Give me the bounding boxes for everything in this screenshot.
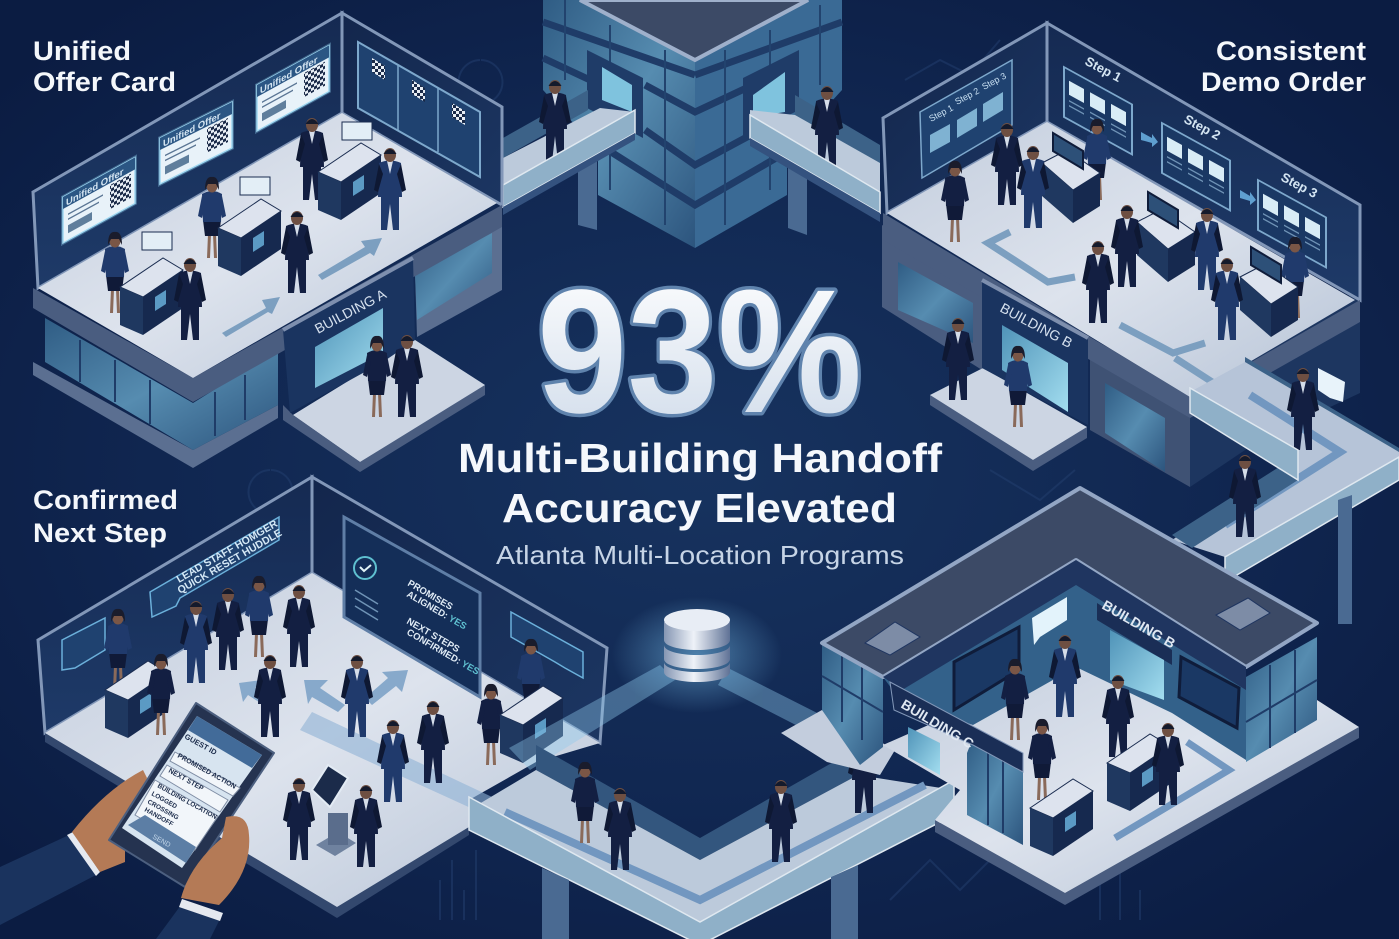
lower facade [45,318,278,450]
right cuff [179,899,223,921]
floor [38,113,497,378]
left wall [33,13,342,288]
desks and people [941,119,1309,340]
left sleeve [0,835,96,925]
porch people [363,336,391,417]
flow arrows [239,670,408,712]
tablet in hands [0,703,274,939]
desks [104,576,563,802]
faint background charts [249,40,1140,920]
right wall [312,477,607,743]
tablet header [188,716,262,768]
tablet screen [122,716,262,868]
icon: data hub [612,597,782,713]
lower left floor wing [781,710,895,775]
floor edge [883,213,1360,418]
panel: Building D [781,488,1359,905]
building B entrance [982,280,1088,425]
tower right face [695,0,842,248]
building B header and door [1097,597,1178,700]
interior back wall right [1076,565,1246,760]
left wall screen: Step 3 [980,71,1008,92]
left wall screen [920,60,1012,178]
door frames [587,50,643,138]
floor route arrows [988,232,1240,400]
lower under block [1190,290,1360,487]
right sleeve [156,905,221,939]
label: Unified Offer Card [33,36,176,97]
floor edge [935,727,1359,905]
kiosk with staff [283,765,382,867]
gateway C: BUILDING C [898,696,977,752]
right wall [1047,23,1360,300]
promises screen: ALIGNED: YES [404,589,468,632]
label: Consistent Demo Order [1201,36,1366,97]
building A entrance [283,258,415,413]
flow streak [300,712,562,842]
right wall [342,13,502,205]
step screens: Step 3 [1279,169,1320,201]
tower bands [543,22,842,205]
label: Unified Offer Card: Offer Card [33,67,176,97]
floor [887,122,1355,397]
tablet fields: BUILDING LOCATION [156,783,218,821]
porch people [942,318,974,400]
lower facade right [1090,338,1190,487]
floor [883,660,1359,893]
porch [283,340,485,472]
offer screens [61,42,331,246]
panel: Building C confirmed next step [38,477,607,918]
floor [45,573,600,907]
step screens: Step 1 [1083,53,1124,85]
promises screen: PROMISES [406,578,454,613]
promises screen [344,517,481,697]
floor arrows [222,238,382,337]
tablet fields: NEXT STEP [167,768,205,793]
headline stat: 93% [537,254,862,450]
offer screens: Unified Offer [66,167,124,209]
shield sign [511,612,583,678]
step screens: Step 2 [1182,111,1223,143]
interior back wall left [883,565,1076,725]
label: Confirmed Next Step: Confirmed [33,485,178,515]
offer screens: Unified Offer [163,111,221,150]
left wall screen: Step 2 [953,86,981,107]
huddle sign: LEAD STAFF HOMGER [174,518,280,586]
left hand [72,770,147,872]
huddle sign: QUICK RESET HUDDLE [176,527,284,597]
tablet body [109,703,274,887]
chat bubble sign [1318,368,1345,402]
building A entrance: BUILDING A [312,285,389,337]
floor edge [33,205,502,402]
interior screens [954,627,1019,710]
left wall [38,477,312,733]
tablet fields: HANDOFF [143,807,174,828]
headline: Multi-Building Handoff [458,435,942,481]
label: Unified Offer Card: Unified [33,36,131,66]
rooftop units [865,622,920,655]
panel: Building B demo order [882,23,1399,624]
tablet fields: GUEST ID [183,732,219,757]
panel: central bridge [469,731,954,939]
right skybridge [750,86,880,222]
center tower [543,0,842,248]
tablet fields: SEND [151,834,171,849]
building B header and door: BUILDING B [1100,597,1178,651]
tablet fields: LOGGED [150,791,178,811]
roof [580,0,808,60]
interior people [1001,659,1029,740]
subheading: Atlanta Multi-Location Programs [496,540,904,570]
walkway [1172,357,1399,624]
promises screen: NEXT STEPS [404,616,461,655]
left cuff [67,832,100,876]
wall chat sign [62,618,105,670]
left wall [883,23,1047,213]
headline [458,435,942,531]
label: Confirmed Next Step: Next Step [33,518,167,548]
right glass facade [1246,637,1317,762]
left glass tower [822,643,883,765]
right hand [181,816,249,905]
promises screen: CONFIRMED: YES [404,627,481,678]
floor edge [45,733,469,918]
roof [822,488,1317,677]
lower slab [33,362,278,468]
headline: Accuracy Elevated [502,485,897,531]
tower left face [543,0,695,248]
label: Consistent Demo Order: Consistent [1216,36,1366,66]
building B entrance: BUILDING B [998,300,1075,351]
tablet fields: PROMISED ACTION [176,753,237,791]
small held cards [142,122,372,250]
panel: Building A offer card [33,13,502,472]
right facade [415,225,502,337]
left skybridge [503,80,635,215]
floor route [1115,742,1229,838]
desks and people [101,118,406,340]
label: Consistent Demo Order: Demo Order [1201,67,1366,97]
tablet fields [128,732,240,863]
label: Confirmed Next Step [33,485,178,548]
data streams [509,665,835,770]
offer screens: Unified Offer [260,55,318,97]
porch [930,368,1087,471]
right wall screen [358,42,480,177]
tower pillars [578,160,597,230]
chat bubble [1032,597,1067,645]
step screens [1064,53,1326,267]
huddle sign [150,517,284,617]
inner fascia [883,560,1246,690]
left wall screen: Step 1 [927,103,955,124]
gateway C [890,682,1023,845]
tablet fields: CROSSING [146,799,180,822]
lower facade left [882,225,982,370]
